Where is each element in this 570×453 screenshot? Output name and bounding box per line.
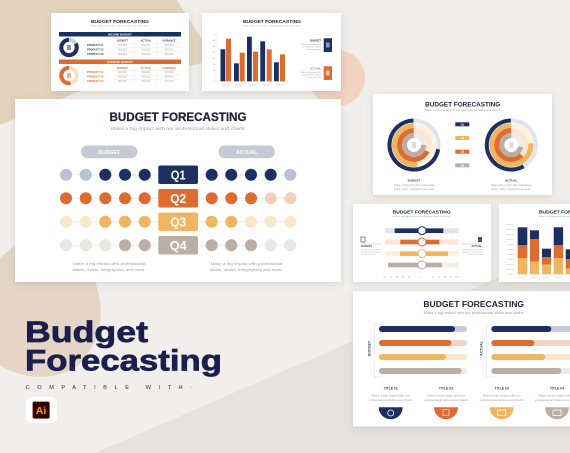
item: title 04: [535, 386, 570, 419]
bar chart: Product: [236, 84, 243, 86]
expense table: $00,000: [142, 76, 151, 78]
income table: $00,000: [118, 53, 127, 56]
row: Q2: [60, 189, 296, 208]
background shape: tan polygon: [0, 0, 215, 125]
caption: budget: [72, 261, 146, 272]
legend: budget: charts and more: [307, 48, 322, 51]
income table: $00,000: [165, 53, 174, 56]
expense table: $00,000: [118, 71, 127, 74]
expense table: BUDGET: [117, 66, 128, 70]
legend pills: [455, 122, 469, 167]
bar chart: Product: [276, 84, 283, 86]
row: Q4: Q4: [170, 238, 187, 253]
item: title 01: [369, 386, 413, 419]
expense table: $00,000: [165, 71, 174, 74]
icon: Adobe Illustrator: [26, 397, 57, 423]
bar group: budget: BUDGET: [368, 340, 372, 356]
expense table: PRODUCT 01: [87, 70, 104, 74]
caption: actual: Make a big impact with professional: [491, 184, 532, 187]
caption: actual: Make a big impact with professional: [210, 261, 283, 266]
legend pills: Q1: [461, 122, 465, 126]
bar group: actual: [480, 323, 570, 377]
subtitle: Make a big impact with our professional slides and charts: [424, 311, 524, 315]
background shape: tan blob: [0, 245, 101, 377]
pill: budget: [81, 146, 138, 158]
item: title 01: professional slides and charts: [369, 398, 413, 402]
row: Q3: [60, 212, 296, 231]
expense table: ACTUAL: [141, 66, 152, 70]
expense table: $00,000: [142, 71, 151, 74]
caption: budget: [394, 178, 434, 191]
pill: actual: ACTUAL: [236, 150, 258, 156]
income table: $00,000: [142, 53, 151, 56]
income table: VARIANCE: [162, 38, 176, 42]
legend: budget: Make a big impact with: [301, 43, 321, 46]
item: title 03: TITLE 03: [495, 386, 509, 390]
panel: horizontal bars slide: [353, 291, 570, 426]
legend: actual: Make a big impact with: [301, 71, 321, 74]
main title: [25, 316, 222, 378]
income table: PRODUCT 01: [87, 43, 104, 47]
legend: actual: our professional slides: [301, 74, 321, 76]
item: title 02: [424, 386, 469, 419]
pill: budget: BUDGET: [98, 150, 121, 156]
bar group: actual: ACTUAL: [480, 340, 484, 356]
expense table: PRODUCT 02: [87, 74, 104, 78]
subtitle: Make a big impact with our professional slides and charts: [111, 126, 246, 131]
range chart: 80: [450, 276, 453, 278]
legend pills: Q3: [461, 150, 465, 154]
income donut: [58, 37, 80, 58]
income band: INCOME BUDGET: [108, 32, 132, 36]
expense table: $00,000: [165, 80, 174, 83]
legend: budget: our professional slides: [301, 46, 321, 48]
caption: actual: ACTUAL: [505, 178, 518, 182]
panel: range bars slide: [353, 204, 491, 282]
income table: PRODUCT 02: [87, 48, 104, 52]
caption: actual: [491, 178, 532, 191]
income table: [87, 38, 181, 56]
legend pills: Q2: [461, 136, 465, 140]
row: Q1: Q1: [171, 167, 186, 182]
expense table: PRODUCT 03: [87, 79, 104, 83]
bar chart: 30: [213, 58, 216, 60]
row: Q4: [60, 236, 296, 254]
heading: BUDGET FORECASTING: [393, 210, 451, 214]
subtitle: Make a big impact with our professional slides and charts: [425, 108, 501, 112]
range chart: 60: [396, 276, 399, 278]
item: title 03: professional slides and charts: [480, 398, 524, 402]
income table: BUDGET: [117, 38, 128, 42]
row: Q2: Q2: [170, 191, 186, 206]
bar chart: Product: [249, 84, 256, 86]
bar chart: Product: [263, 84, 270, 86]
label: budget: BUDGET: [361, 244, 372, 248]
bar chart: 10: [213, 70, 216, 72]
range chart: [383, 224, 460, 278]
expense band: EXPENSE BUDGET: [107, 60, 133, 64]
legend pills: Q4: [461, 163, 465, 167]
income table: PRODUCT 03: [87, 52, 104, 56]
main title: Forecasting: [25, 345, 222, 378]
expense table: $00,000: [118, 76, 127, 78]
caption: budget: slides, charts, infographics and more.: [72, 267, 146, 272]
caption: budget: Make a big impact with professional: [394, 184, 434, 187]
item: title 02: professional slides and charts: [424, 398, 469, 402]
heading: BUDGET FORECASTING: [423, 300, 524, 309]
bar chart: Product: [222, 84, 229, 86]
legend: actual: ACTUAL: [310, 66, 321, 70]
income table: ACTUAL: [141, 38, 152, 42]
legend: actual: charts and more: [307, 76, 322, 79]
range chart: 0: [420, 276, 422, 278]
panel: radial donut slide: [373, 94, 552, 195]
main title: Budget: [25, 316, 148, 349]
income table: $00,000: [142, 48, 151, 52]
income table: $00,000: [165, 48, 174, 52]
caption: actual: slides, charts, infographics and more.: [491, 188, 532, 191]
expense table: VARIANCE: [162, 66, 176, 70]
expense table: $00,000: [142, 80, 151, 83]
caption: budget: BUDGET: [408, 178, 420, 182]
background shape: grey diagonal: [95, 247, 570, 453]
panel: main Q1-Q4 slide: [15, 99, 341, 282]
item: title 01: TITLE 01: [384, 386, 398, 390]
panel: stacked bars slide: [499, 204, 570, 282]
compatible with label: COMPATIBLE WITH:: [26, 385, 192, 391]
range chart: 100: [455, 276, 460, 278]
range chart: 100: [383, 276, 388, 278]
expense donut: [60, 67, 78, 84]
expense table: [87, 66, 181, 84]
item: title 01: Make a big impact with our: [372, 394, 410, 398]
heading: BUDGET FORECASTING: [110, 112, 247, 124]
bar chart: 20: [213, 64, 216, 66]
income table: $00,000: [165, 44, 174, 47]
item: title 02: Make a big impact with our: [427, 394, 465, 398]
stacked bar chart: [507, 224, 570, 278]
income table: $00,000: [118, 44, 127, 47]
income table: $00,000: [118, 48, 127, 52]
bar chart: 40: [213, 52, 216, 54]
bar group: budget: [368, 323, 467, 377]
caption: budget: Make a big impact with professional: [73, 261, 145, 266]
panel: budget tables: [51, 13, 189, 91]
bar chart: 70: [213, 34, 216, 36]
range chart: 40: [438, 276, 441, 278]
caption: budget: slides, charts, infographics and more.: [394, 188, 434, 191]
subtitle: Make a big impact with our professional slides and charts: [91, 24, 150, 28]
panel: bar chart slide: [202, 13, 341, 91]
income table: $00,000: [142, 44, 151, 47]
range chart: 40: [402, 276, 405, 278]
caption: actual: [210, 261, 283, 272]
legend: actual: [301, 66, 332, 80]
icon: Adobe Illustrator: Ai: [36, 405, 46, 417]
radial chart: actual: [478, 112, 545, 178]
subtitle: Make a big impact with our professional slides and charts: [393, 215, 452, 218]
row: Q1: [60, 166, 296, 184]
radial chart: budget: [386, 117, 442, 173]
heading: BUDGET FORECASTING: [91, 19, 149, 24]
item: title 03: Make a big impact with our: [483, 394, 521, 398]
bar chart: 50: [213, 46, 216, 48]
label: actual: ACTUAL: [471, 244, 482, 248]
caption: actual: slides, charts, infographics and more.: [210, 267, 283, 272]
pill: actual: [218, 146, 275, 158]
item: title 04: TITLE 04: [550, 386, 564, 390]
expense table: $00,000: [118, 80, 127, 83]
subtitle: Make a big impact with our professional slides and charts: [243, 24, 302, 28]
legend: budget: [301, 38, 332, 52]
item: title 02: TITLE 02: [439, 386, 453, 390]
bar chart: [213, 33, 288, 86]
bar chart: 60: [213, 40, 216, 42]
bar chart: 0: [214, 81, 216, 83]
range chart: 20: [432, 276, 435, 278]
legend: budget: BUDGET: [310, 38, 321, 42]
range chart: 20: [408, 276, 411, 278]
heading: BUDGET FORECASTING: [243, 19, 301, 24]
heading: BUDGET FORECASTING: [425, 102, 501, 108]
range chart: 60: [444, 276, 447, 278]
expense table: $00,000: [165, 76, 174, 78]
range chart: 80: [390, 276, 393, 278]
item: title 03: [480, 386, 524, 419]
background shape: peach circle: [309, 50, 365, 106]
row: Q3: Q3: [170, 214, 186, 229]
